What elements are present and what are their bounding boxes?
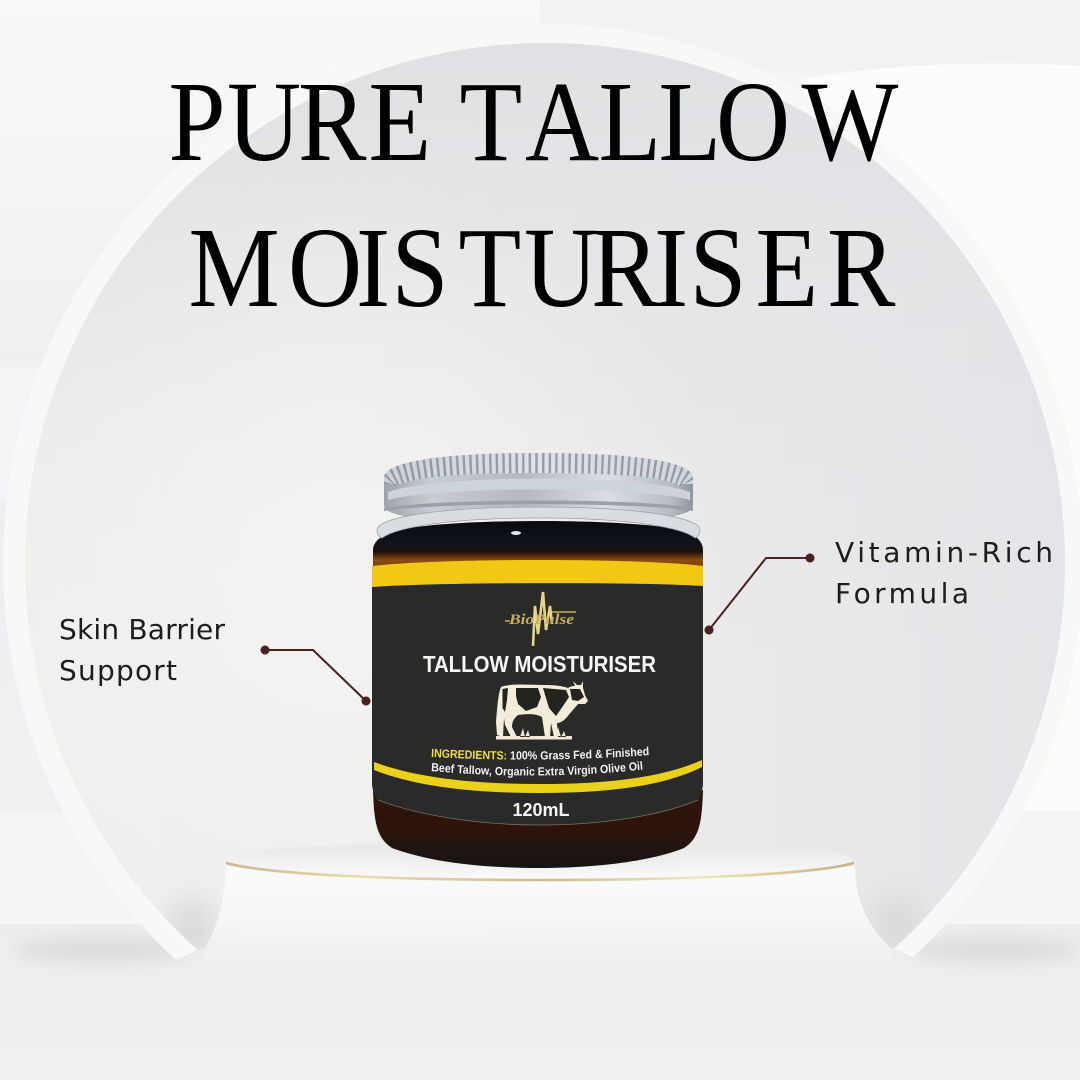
callout text: Skin Barrier [59,613,225,646]
callout dots [261,646,371,706]
pedestal body [203,866,893,1005]
label lower edge [378,800,698,825]
callout text: Support [59,654,177,687]
logo pulse mark [533,592,552,646]
pedestal top disc [225,844,855,880]
pedestal gold trim [226,863,854,880]
jar lower body [373,790,703,868]
callout dots [705,554,815,634]
product name: TALLOW MOISTURISER [423,651,656,677]
callout text: Formula [835,577,969,610]
callout connector [709,558,810,630]
callout: vitamin-rich formula [705,536,1053,634]
cow grass [496,727,572,740]
callout text: Vitamin-Rich [835,536,1053,569]
glass reflection [511,531,521,535]
pedestal shadow [400,843,680,857]
logo [505,592,576,646]
label top yellow band [372,560,703,587]
jar lid [377,453,700,538]
label bottom yellow band [374,760,702,793]
ingredients line one: INGREDIENTS: 100% Grass Fed & Finished [432,746,649,760]
volume: 120mL [512,800,570,820]
callout: skin barrier support [59,613,371,706]
title [168,59,899,331]
ingredients text [432,746,649,778]
arch ring [3,294,945,960]
label [372,564,703,825]
pedestal [203,843,893,1005]
lid knurled edge [384,460,693,484]
callout connector [265,650,366,701]
jar glass shoulder [373,521,703,570]
ingredients line two: Beef Tallow, Organic Extra Virgin Olive Oil [432,761,642,778]
lid highlight [388,478,690,500]
logo wordmark: BioPulse [508,612,575,628]
logo rules [505,612,576,621]
cow patches [502,688,584,716]
title line two: MOISTURISER [188,205,896,331]
floor [9,924,1080,972]
title line one: PURE TALLOW [168,59,899,185]
lid lower rim [377,507,700,538]
product jar [372,453,703,868]
icon: cow [496,681,588,740]
